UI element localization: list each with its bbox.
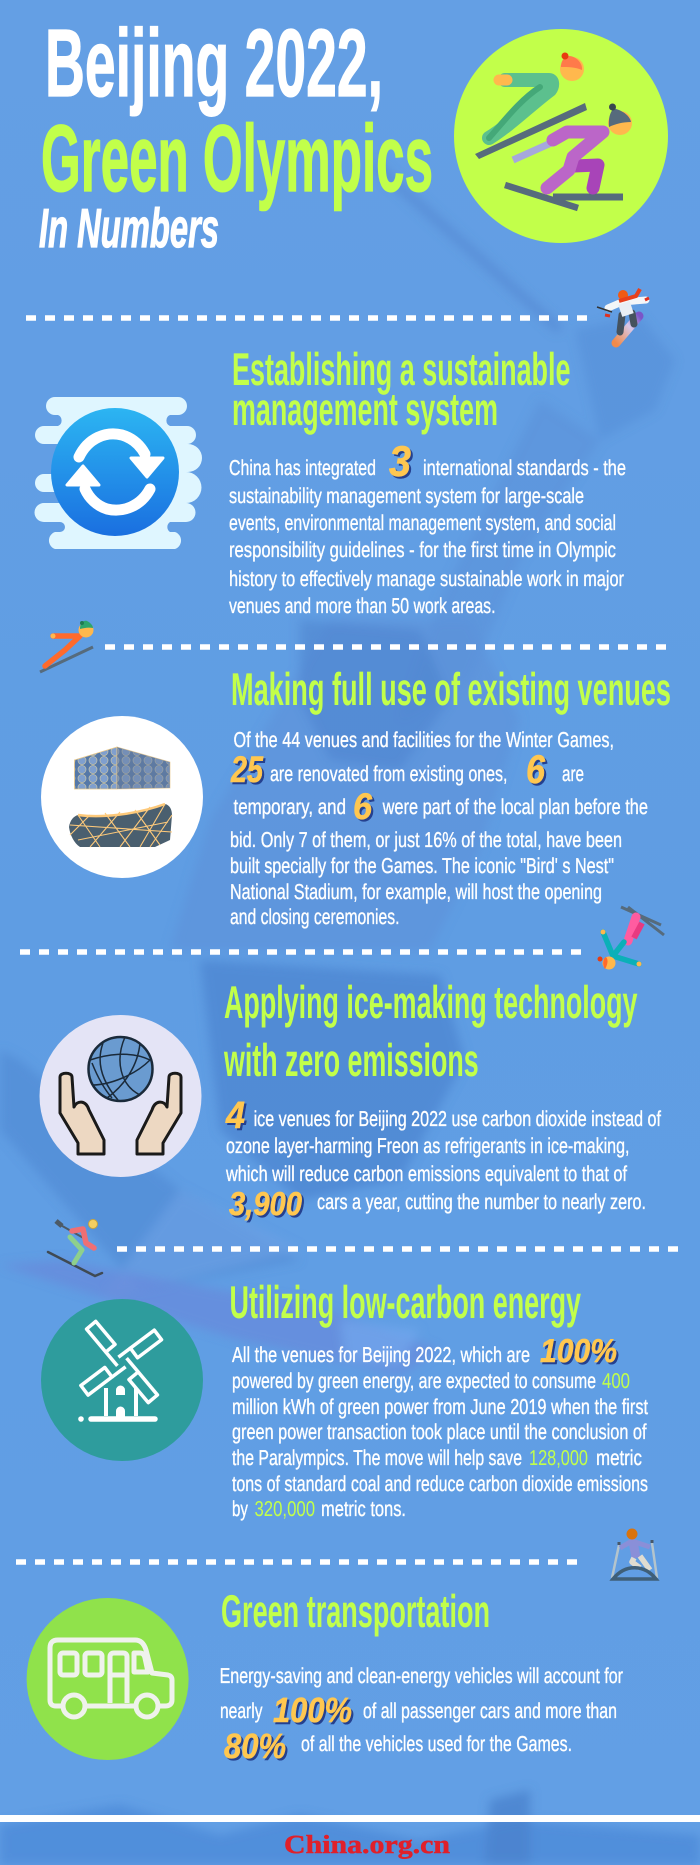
body text: 100% xyxy=(273,1691,352,1730)
footer rule xyxy=(0,1815,700,1822)
panel: ice-making technology xyxy=(40,976,661,1222)
icon: Water Cube and Bird's Nest in white circle xyxy=(41,716,203,878)
body text: sustainability management system for large-scale xyxy=(229,484,584,508)
icon: windmill xyxy=(41,1299,203,1461)
heading: Green transportation xyxy=(221,1585,490,1637)
footer logo text: China.org.cn xyxy=(284,1830,451,1859)
body text xyxy=(232,1332,648,1521)
body text: 100% xyxy=(540,1332,617,1369)
body text xyxy=(225,1095,661,1222)
divider with snowboarder icon xyxy=(26,289,649,343)
body text: 4 xyxy=(225,1095,245,1137)
divider with ski jumper icon xyxy=(40,621,668,672)
body text: China has integrated xyxy=(229,456,376,480)
body text: international standards - the xyxy=(423,456,626,480)
body text: temporary, and xyxy=(234,795,346,819)
body text: 128,000 xyxy=(529,1446,588,1470)
body text xyxy=(220,1664,623,1766)
body text: 80% xyxy=(224,1727,286,1766)
icon: ski jumper xyxy=(40,621,94,672)
icon: downhill skier xyxy=(48,1220,102,1276)
body text: 3,900 xyxy=(229,1185,303,1222)
heading xyxy=(232,343,570,435)
title: In Numbers xyxy=(39,197,219,259)
body text: 320,000 xyxy=(254,1497,315,1521)
body text: by xyxy=(232,1497,248,1521)
body text: and closing ceremonies. xyxy=(230,905,400,929)
icon: aerial skier xyxy=(598,907,664,970)
body text: nearly xyxy=(220,1699,263,1723)
body text: 6 xyxy=(526,748,546,792)
body text: are xyxy=(562,762,584,786)
body text xyxy=(230,728,648,929)
title xyxy=(39,10,433,259)
body text: 6 xyxy=(353,786,372,827)
divider with downhill skier icon xyxy=(48,1220,678,1276)
divider with para skier icon xyxy=(16,1528,657,1579)
body text xyxy=(229,438,626,618)
body text: All the venues for Beijing 2022, which are xyxy=(232,1343,530,1367)
body text: of all passenger cars and more than xyxy=(363,1699,617,1723)
divider with aerial skier icon xyxy=(20,907,664,970)
body text: are renovated from existing ones, xyxy=(270,762,508,786)
body text: the Paralympics. The move will help save xyxy=(232,1446,522,1470)
heading: management system xyxy=(232,383,498,435)
body text: metric tons. xyxy=(321,1497,406,1521)
icon: hands holding globe xyxy=(40,1015,202,1177)
body text: of all the vehicles used for the Games. xyxy=(301,1732,572,1756)
panel: low-carbon energy xyxy=(41,1276,648,1521)
body text: 25 xyxy=(230,749,264,790)
title: Beijing 2022, xyxy=(45,10,383,117)
body text: metric xyxy=(596,1446,642,1470)
panel: green transportation xyxy=(27,1585,623,1766)
icon: sync arrows over cloud xyxy=(34,397,202,549)
body text: venues and more than 50 work areas. xyxy=(229,594,496,618)
panel: sustainable management system xyxy=(34,343,626,618)
icon: snowboarder xyxy=(597,289,649,343)
body text: 3 xyxy=(389,438,411,486)
body text: 400 xyxy=(602,1369,630,1393)
panel: existing venues xyxy=(41,663,671,929)
heading: with zero emissions xyxy=(223,1034,479,1086)
icon: bus xyxy=(27,1598,189,1760)
heading xyxy=(223,976,638,1086)
icon: para skier xyxy=(612,1528,657,1579)
icon: ski jumpers in lime circle xyxy=(454,29,668,243)
